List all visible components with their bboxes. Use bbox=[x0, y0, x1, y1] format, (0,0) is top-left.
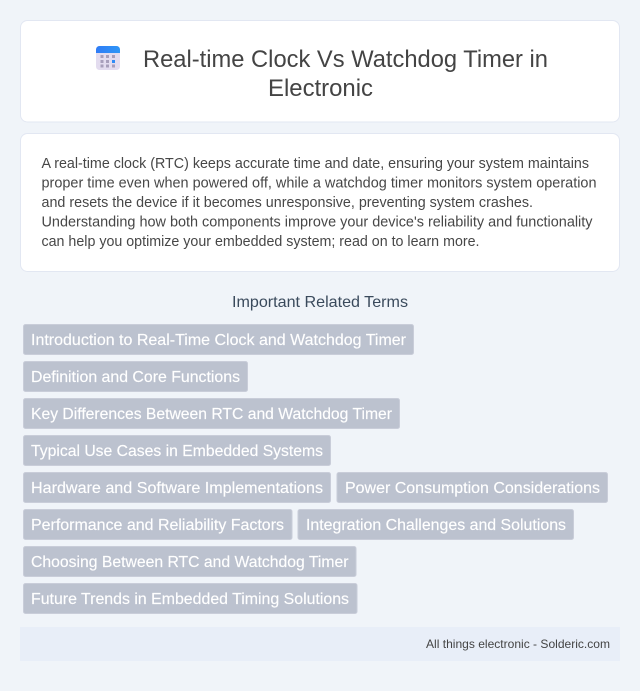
title bbox=[143, 46, 548, 102]
text block: description: A real-time clock (RTC) keeps accurate time and date, ensuring your system maintains bbox=[42, 156, 589, 172]
panel: description bbox=[20, 134, 620, 272]
tag: introduction bbox=[24, 324, 414, 354]
tag: performance bbox=[24, 510, 292, 540]
tag: choosing: Choosing Between RTC and Watchdog Timer bbox=[31, 554, 349, 571]
title: Real-time Clock Vs Watchdog Timer in bbox=[143, 46, 548, 73]
tag: introduction: Introduction to Real-Time Clock and Watchdog Timer bbox=[31, 332, 407, 349]
tag: choosing bbox=[24, 546, 356, 576]
tag: hardware and software bbox=[24, 472, 330, 502]
title: Electronic bbox=[268, 75, 373, 102]
tag: power consumption: Power Consumption Considerations bbox=[345, 480, 600, 497]
tag: future trends: Future Trends in Embedded Timing Solutions bbox=[31, 591, 349, 608]
tag: use cases bbox=[24, 436, 330, 466]
tag: definition bbox=[24, 362, 248, 392]
text block: description: and resets the device if it becomes unresponsive, preventing system crashes. bbox=[42, 195, 533, 211]
tag: key differences bbox=[24, 398, 400, 428]
footer bbox=[20, 627, 620, 661]
tag: power consumption bbox=[337, 472, 608, 502]
icon: calendar bbox=[96, 46, 120, 70]
tag: integration bbox=[298, 510, 574, 540]
text block: description: can help you optimize your embedded system; read on to learn more. bbox=[42, 234, 480, 250]
tag: key differences: Key Differences Between RTC and Watchdog Timer bbox=[31, 406, 393, 423]
tag: future trends bbox=[24, 584, 357, 614]
panel: header bbox=[20, 20, 620, 122]
text block: description: proper time even when powered off, while a watchdog timer monitors system operation bbox=[42, 176, 596, 192]
tag: use cases: Typical Use Cases in Embedded Systems bbox=[31, 443, 323, 460]
heading: important related terms: Important Related Terms bbox=[232, 294, 408, 311]
tag: definition: Definition and Core Functions bbox=[31, 369, 240, 386]
footer: All things electronic - Solderic.com bbox=[426, 637, 610, 651]
text block: description bbox=[42, 156, 596, 250]
tag: performance: Performance and Reliability Factors bbox=[31, 517, 284, 534]
tag: hardware and software: Hardware and Software Implementations bbox=[31, 480, 323, 497]
tag: integration: Integration Challenges and Solutions bbox=[306, 517, 566, 534]
text block: description: Understanding how both components improve your device's reliability and functionality bbox=[42, 214, 593, 230]
